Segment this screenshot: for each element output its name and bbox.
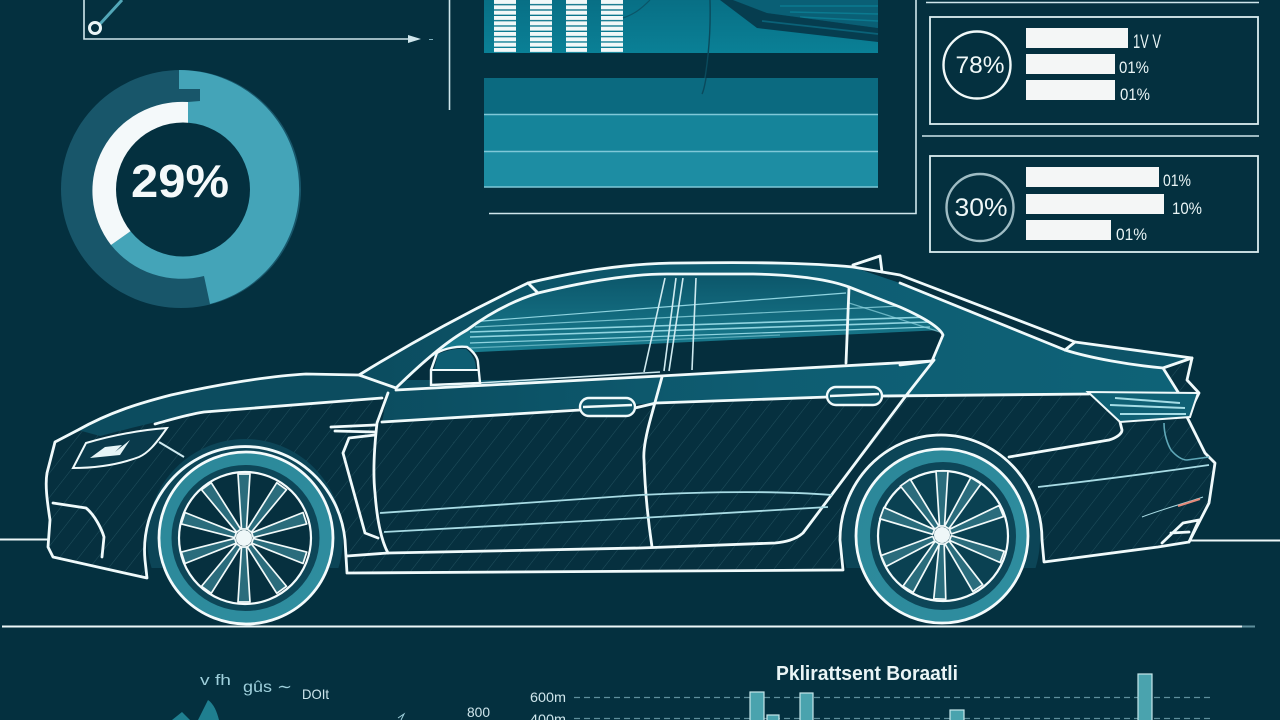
front wheel arch — [147, 439, 343, 568]
small chart labels: gûs ∼ — [243, 679, 292, 696]
front wheel — [159, 452, 333, 624]
line chart axis fragment — [84, 0, 433, 43]
small chart labels — [200, 672, 490, 720]
stat labels two: 01% — [1163, 171, 1191, 190]
car upper body panels — [359, 263, 1178, 422]
divider line beside donut — [448, 0, 450, 110]
panel: layered bands — [484, 78, 878, 187]
bottom bar chart — [530, 663, 1212, 720]
stat labels one: 01% — [1119, 58, 1149, 77]
tail light — [1088, 392, 1209, 460]
door handles — [580, 387, 882, 416]
body character lines — [380, 465, 1209, 532]
chart title: Pklirattsent Boraatli — [776, 663, 958, 685]
chart axis labels: 600m — [530, 689, 566, 705]
striped bars — [494, 0, 623, 53]
car hood panel — [78, 374, 396, 436]
donut value: 29% — [131, 155, 229, 207]
car outline strokes — [46, 256, 1215, 578]
rear wheel arch — [842, 437, 1040, 568]
car pillars and glass lines — [478, 278, 696, 383]
car window glass — [406, 288, 942, 380]
stat labels one — [1119, 32, 1161, 104]
car body lower hatched fill — [46, 263, 1215, 578]
donut chart 29% — [61, 70, 301, 308]
stat labels one: 1V V — [1133, 32, 1161, 53]
small chart labels: 800 — [467, 704, 490, 720]
stat labels one: 01% — [1120, 85, 1150, 104]
car illustration — [46, 256, 1215, 639]
stat ring one — [944, 32, 1010, 98]
stat labels two — [1116, 171, 1202, 244]
reflector — [1178, 499, 1200, 506]
dark roof strip — [853, 267, 1075, 350]
center panel frame — [489, 0, 916, 214]
car spoiler panel — [1065, 342, 1192, 368]
stat ring one: 78% — [956, 52, 1004, 79]
stat labels two: 10% — [1172, 199, 1202, 218]
stat ring two — [946, 174, 1014, 241]
panel: stat box one — [930, 17, 1258, 124]
bottom left chart fragment — [172, 672, 490, 720]
rear wheel — [856, 449, 1028, 623]
panel: striped bar chart — [484, 0, 878, 94]
chart axis labels — [530, 689, 566, 720]
panel: stat box two — [930, 156, 1258, 252]
headlight — [73, 428, 184, 468]
stat bars two — [1026, 167, 1164, 240]
stat ring two: 30% — [954, 194, 1008, 222]
side mirror — [431, 347, 480, 385]
chart bars — [750, 674, 1152, 720]
stat bars one — [1026, 28, 1128, 100]
stat labels two: 01% — [1116, 225, 1147, 244]
ground lines — [0, 540, 1280, 626]
small chart labels: v fh — [200, 672, 231, 689]
small chart labels: DOIt — [302, 686, 329, 702]
